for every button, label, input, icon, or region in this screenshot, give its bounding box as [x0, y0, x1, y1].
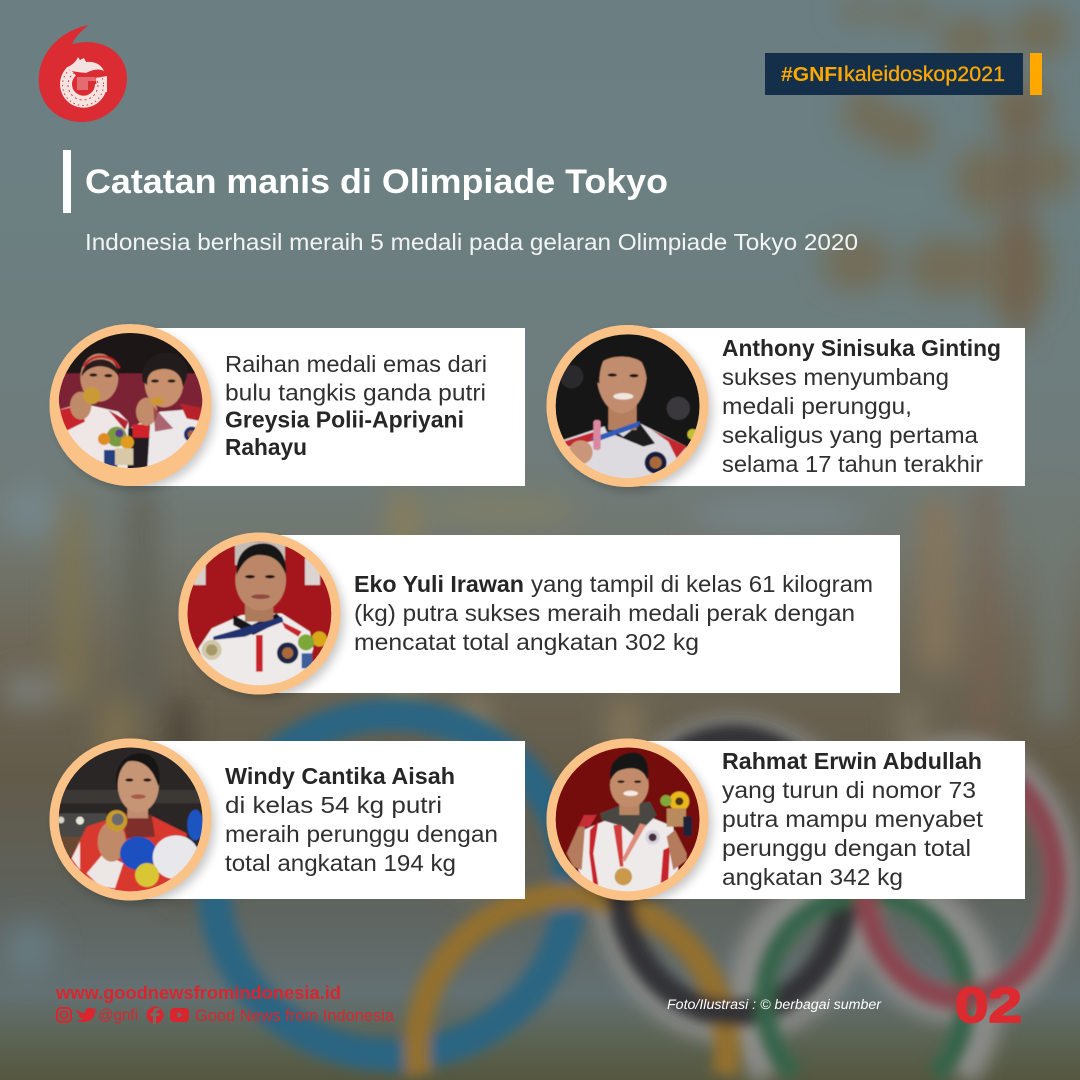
text: Rahmat bronze medal [722, 748, 984, 890]
subtitle: Indonesia berhasil meraih 5 medali pada gelaran Olimpiade Tokyo 2020 [85, 229, 858, 255]
footer: website and social links: www.goodnewsfromindonesia.id [55, 983, 341, 1003]
text: Eko silver medal: yang tampil di kelas 61 kilogram [531, 571, 873, 597]
text: Anthony bronze medal: sekaligus yang pertama [722, 422, 978, 448]
panel: Eko Yuli Irawan [178, 532, 900, 698]
logo: Good News from Indonesia [39, 25, 127, 122]
text: Eko silver medal: Eko Yuli Irawan [354, 571, 524, 597]
text: Anthony bronze medal: selama 17 tahun terakhir [722, 451, 983, 477]
text: Windy bronze medal: di kelas 54 kg putri [225, 792, 442, 818]
text: gold medal: bulu tangkis ganda putri [225, 380, 486, 406]
text: Windy bronze medal: meraih perunggu dengan [225, 821, 498, 847]
heading block [63, 150, 668, 213]
text: Rahmat bronze medal: perunggu dengan total [722, 835, 971, 861]
hashtag badge: kaleidoskop2021 [844, 63, 1005, 86]
text: Windy bronze medal: Windy Cantika Aisah [225, 763, 455, 789]
text: Anthony bronze medal [722, 335, 1001, 477]
text: gold medal: Raihan medali emas dari [225, 351, 487, 377]
text: gold medal: Greysia Polii-Apriyani [225, 406, 464, 432]
photo credit: Foto/Ilustrasi : © berbagai sumber [667, 997, 882, 1012]
footer: website and social links [55, 983, 395, 1025]
text: gold medal: Rahayu [225, 434, 307, 460]
footer: website and social links: @gnfi [98, 1007, 138, 1024]
icon: youtube [170, 1008, 189, 1022]
text: gold medal [225, 351, 487, 460]
icon: instagram [57, 1008, 71, 1022]
hashtag badge: #GNFI [781, 63, 843, 86]
panel: Rahmat Erwin Abdullah [546, 738, 1025, 904]
icon: twitter [76, 1008, 97, 1022]
text: Anthony bronze medal: sukses menyumbang [722, 364, 949, 390]
hashtag badge [765, 53, 1042, 95]
text: Rahmat bronze medal: angkatan 342 kg [722, 864, 903, 890]
footer: website and social links: Good News from Indonesia [195, 1006, 395, 1025]
icon: facebook [146, 1006, 164, 1024]
text: Windy bronze medal: total angkatan 194 kg [225, 850, 456, 876]
text: Windy bronze medal [225, 763, 498, 876]
text: Eko silver medal: mencatat total angkatan 302 kg [354, 629, 699, 655]
panel: Windy Cantika Aisah [50, 738, 525, 904]
text: Anthony bronze medal: medali perunggu, [722, 393, 912, 419]
text: Rahmat bronze medal: putra mampu menyabet [722, 806, 984, 832]
page number: 02 [955, 979, 1022, 1033]
text: Eko silver medal [354, 571, 873, 655]
heading block: Catatan manis di Olimpiade Tokyo [85, 163, 668, 201]
text: Eko silver medal: (kg) putra sukses meraih medali perak dengan [354, 600, 855, 626]
text: Anthony bronze medal: Anthony Sinisuka Ginting [722, 335, 1001, 361]
panel: Greysia Polii and Apriyani Rahayu [50, 322, 525, 490]
panel: Anthony Sinisuka Ginting [546, 325, 1025, 491]
text: Rahmat bronze medal: yang turun di nomor 73 [722, 777, 976, 803]
text: Rahmat bronze medal: Rahmat Erwin Abdullah [722, 748, 982, 774]
